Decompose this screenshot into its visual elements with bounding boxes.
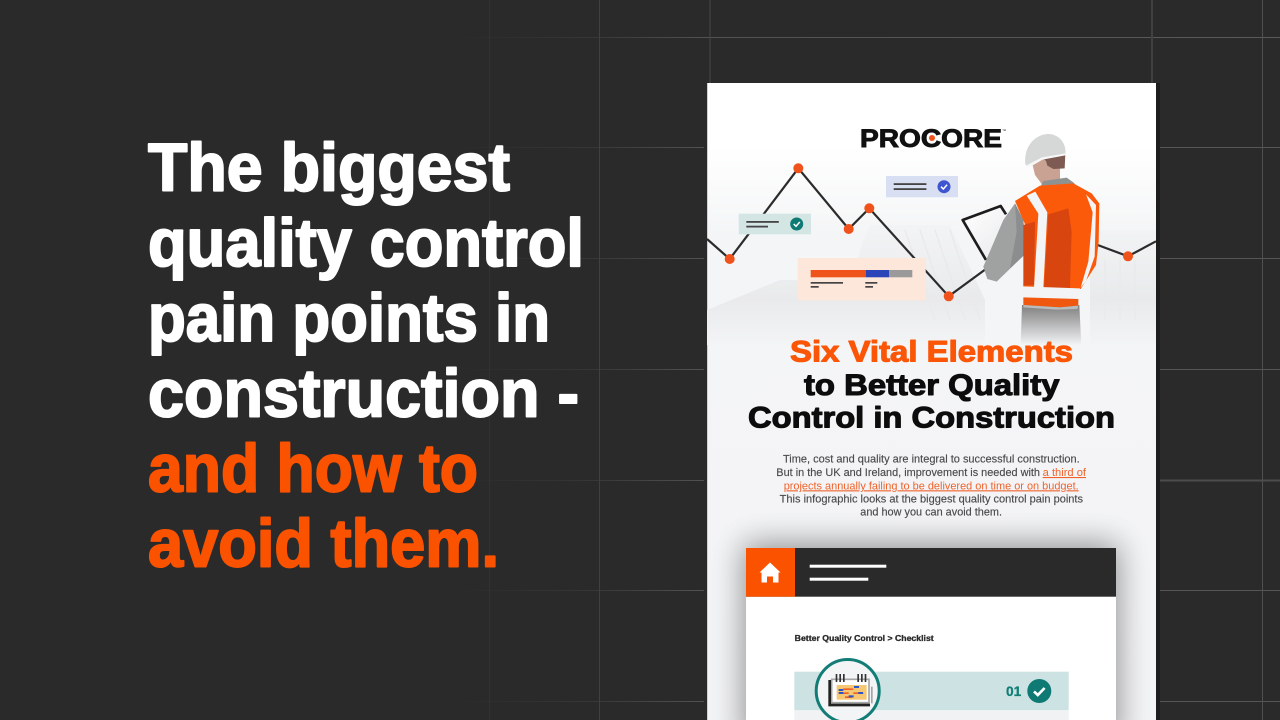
intro text <box>776 453 1087 519</box>
hair <box>1043 154 1065 169</box>
legs <box>1021 305 1081 345</box>
icon: home <box>760 562 780 582</box>
headline: pain points in <box>148 280 550 356</box>
title: to Better Quality <box>804 369 1060 402</box>
intro text: and how you can avoid them. <box>860 507 1002 519</box>
tablet <box>963 206 1020 260</box>
callout: blue check card <box>886 176 958 197</box>
panel: infographic preview <box>707 83 1156 720</box>
logo <box>861 128 1006 148</box>
icon: check <box>1027 679 1051 703</box>
intro text: But in the UK and Ireland, improvement is needed with <box>776 467 1040 479</box>
title: Six Vital Elements <box>790 336 1073 369</box>
background grid <box>450 0 1280 720</box>
logo: PROCORE <box>860 125 1002 153</box>
headline: avoid them. <box>148 506 499 582</box>
line chart <box>707 163 1156 301</box>
headline <box>148 130 584 581</box>
headline: construction - <box>148 356 579 432</box>
illustration: construction worker <box>963 134 1099 345</box>
hard hat <box>1025 134 1066 168</box>
logo: ™ <box>1002 128 1006 133</box>
callout: green check card <box>739 214 811 234</box>
intro text: Time, cost and quality are integral to successful construction. <box>783 453 1080 465</box>
headline: The biggest <box>148 130 510 206</box>
arm <box>983 203 1026 282</box>
neck and head <box>1032 159 1060 186</box>
collar <box>1041 178 1075 186</box>
card header <box>746 548 1116 597</box>
breadcrumb: Better Quality Control > Checklist <box>795 634 934 643</box>
panel edge shadow <box>1156 83 1160 720</box>
checklist row 01 <box>794 660 1069 720</box>
title <box>748 340 1114 428</box>
callout: progress bar card <box>798 258 926 300</box>
intro text: This infographic looks at the biggest quality control pain points <box>780 493 1083 505</box>
title: Control in Construction <box>748 402 1115 435</box>
panel: checklist card <box>746 548 1116 720</box>
row number: 01 <box>1006 683 1022 699</box>
intro text: a third of <box>1043 467 1087 479</box>
headline: quality control <box>148 205 584 281</box>
card shadow <box>744 544 1118 720</box>
intro text: projects annually failing to be delivered on time or on budget. <box>784 480 1079 492</box>
background buildings <box>707 225 1156 345</box>
icon: calendar <box>816 660 879 720</box>
headline: and how to <box>148 430 478 506</box>
safety vest <box>1015 183 1099 310</box>
